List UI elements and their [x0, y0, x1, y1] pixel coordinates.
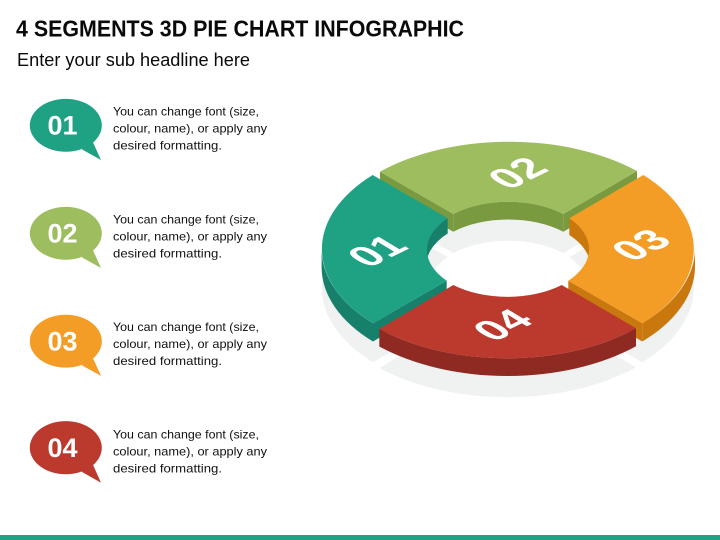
description 04: colour, name), or apply any	[113, 444, 267, 458]
bottom bar	[0, 535, 720, 540]
item 02	[30, 207, 267, 268]
speech bubble 03	[30, 315, 102, 376]
description 01: desired formatting.	[113, 138, 222, 152]
segment 04	[379, 285, 636, 376]
speech bubble 01	[30, 99, 102, 160]
item 03	[30, 315, 267, 376]
segment 02	[380, 142, 637, 232]
ground shadow	[322, 181, 694, 397]
subtitle: Enter your sub headline here	[17, 50, 250, 70]
segment 03: 03	[600, 223, 682, 267]
speech bubble 04	[30, 421, 102, 483]
description 02: You can change font (size,	[113, 212, 259, 226]
speech bubble 01: 01	[47, 110, 78, 140]
item 01	[30, 99, 267, 160]
speech bubble 02	[30, 207, 102, 268]
description 03: colour, name), or apply any	[113, 337, 267, 351]
description 03	[113, 320, 267, 368]
speech bubble 02: 02	[47, 218, 78, 248]
description 02	[113, 212, 267, 260]
description 01: You can change font (size,	[113, 104, 259, 118]
description 02: colour, name), or apply any	[113, 229, 267, 243]
description 04: You can change font (size,	[113, 427, 259, 441]
title: 4 SEGMENTS 3D PIE CHART INFOGRAPHIC	[16, 16, 464, 42]
description 02: desired formatting.	[113, 246, 222, 260]
speech bubble 04: 04	[47, 433, 78, 463]
description 04	[113, 427, 267, 475]
segment 03	[568, 175, 695, 342]
speech bubble 03: 03	[47, 326, 78, 356]
description 03: desired formatting.	[113, 354, 222, 368]
segment 01	[322, 175, 448, 342]
description 01	[113, 104, 267, 152]
description 04: desired formatting.	[113, 461, 222, 475]
3D pie chart	[322, 142, 695, 397]
segment 04: 04	[461, 303, 543, 347]
segment 02: 02	[476, 151, 558, 195]
description 03: You can change font (size,	[113, 320, 259, 334]
segment 01: 01	[336, 229, 418, 273]
item 04	[30, 421, 267, 483]
description 01: colour, name), or apply any	[113, 121, 267, 135]
